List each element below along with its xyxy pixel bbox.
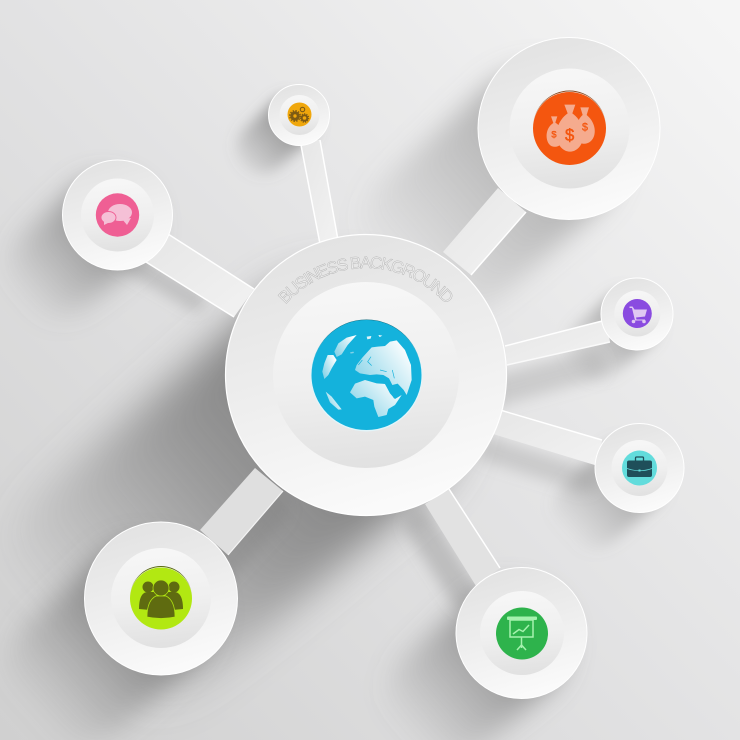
map: continents [322,335,412,417]
connector: centre to gear node [300,140,338,244]
connector: centre to purple node [505,320,610,365]
connector: centre to green node [425,489,500,586]
long cast shadows [55,122,628,700]
icon: money bags [547,105,595,152]
node: pink chat [62,160,172,270]
heading: business background: BUSINESS BACKGROUND [278,256,452,304]
connector: centre to pink node [146,234,254,317]
node: teal briefcase [595,424,684,512]
connector: centre to orange node [443,188,526,275]
icon: speech bubbles [101,204,132,225]
connector: centre to teal node [493,410,602,466]
node: yellow gears [268,84,330,146]
icon: briefcase [627,457,652,477]
node: lime people [84,522,238,675]
map: inland seas [358,357,394,398]
icon: globe [310,319,422,432]
icon: money bags: $ [565,125,574,144]
icon: gears [290,107,309,122]
icon: presentation board [507,616,537,650]
node: orange money bags [478,38,660,220]
icon: money bags: $ [582,122,588,134]
central hub panel [224,234,507,516]
connector: centre to lime node [200,468,283,555]
icon: shopping cart [630,306,647,323]
node: green presentation [456,568,587,698]
icon: money bags: $ [551,129,557,139]
node: purple cart [601,278,673,350]
icon: group of people [139,580,183,618]
